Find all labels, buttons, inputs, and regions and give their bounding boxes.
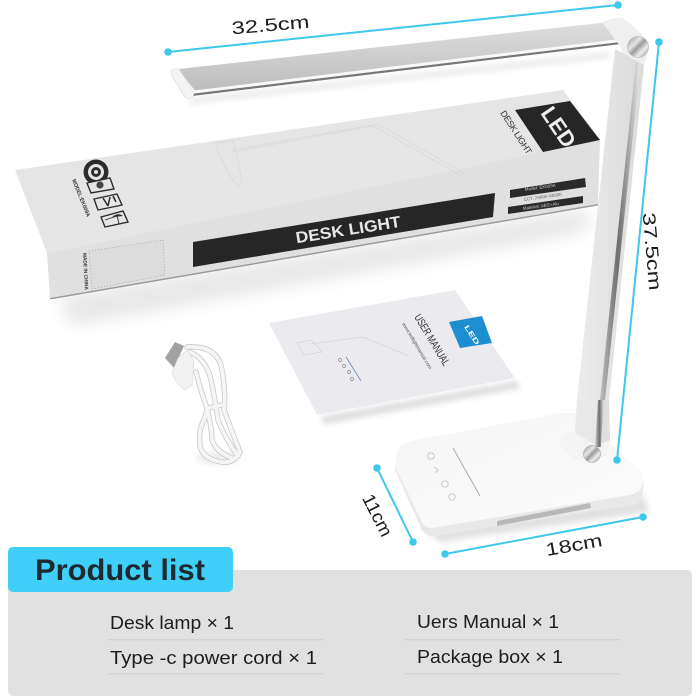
panel: product list [8,547,692,696]
heading tab [8,547,233,592]
dimension: length 18cm: 18cm [544,530,604,560]
touch strip [453,448,480,496]
box top face [15,90,600,253]
spec label: material: Material: ABS+Alu [522,201,560,211]
dimension: height 37.5cm: 37.5cm [639,212,665,291]
lamp line drawing on box [215,124,464,187]
lower arm overlay [575,400,598,445]
touch buttons [428,453,455,500]
usb plug metal [165,342,184,368]
package box [15,90,600,326]
light bar [497,503,591,526]
spec label: model: Model: EK009A [524,183,556,192]
tag text: LED [462,324,480,347]
item: package box: Package box × 1 [417,647,563,667]
LED logo: LED [536,102,581,152]
black banner [193,193,495,267]
item: desk lamp: Desk lamp × 1 [110,613,234,633]
arm shadow [190,52,610,104]
dimension: width 32.5cm: 32.5cm [231,12,310,38]
lamp head end cap [171,69,194,98]
hinge mount [560,431,610,460]
blue tag [449,316,492,348]
lamp base [395,413,644,536]
user manual [269,290,520,424]
box front face [47,140,600,298]
recycling icons [84,160,128,227]
usb cable [165,342,240,465]
cable loops [187,347,240,462]
desk lamp [171,18,650,542]
hinge cap [602,18,649,65]
lamp head arm [178,22,625,92]
silver strip [596,62,640,448]
spec label: material [508,196,583,214]
banner text: DESK LIGHT [295,214,402,247]
LED block [515,101,600,152]
manual small text: www.ledlightmanual.com [400,322,433,370]
vertical arm [575,49,644,442]
base shadow [420,490,650,542]
manual line drawing [297,337,409,356]
side label: DESK LIGHT [498,109,534,156]
item: user manual: Uers Manual × 1 [417,612,559,632]
dimension: depth 11cm [358,464,417,546]
base knob [584,446,600,462]
dimension: height 37.5cm [613,38,665,464]
model text: MODEL:EK009A [70,179,91,218]
dimension: length 18cm [441,513,647,560]
spec label: CCT: CCT: 2900K-6000K [523,192,563,202]
manual title: USER MANUAL [411,312,452,368]
heading tab: Product list [35,554,205,587]
cable loops shadow [187,347,240,462]
manual cover [269,290,515,415]
item: power cord: Type -c power cord × 1 [110,648,317,668]
dotted label area [89,240,165,289]
dimension: depth 11cm: 11cm [358,491,396,540]
manual dots [338,358,354,380]
made in china text: MADE IN CHINA [81,253,89,290]
spec label: model [510,178,586,198]
usb plug body [172,350,194,390]
dimension: width 32.5cm [164,1,622,56]
top knob [628,36,648,58]
